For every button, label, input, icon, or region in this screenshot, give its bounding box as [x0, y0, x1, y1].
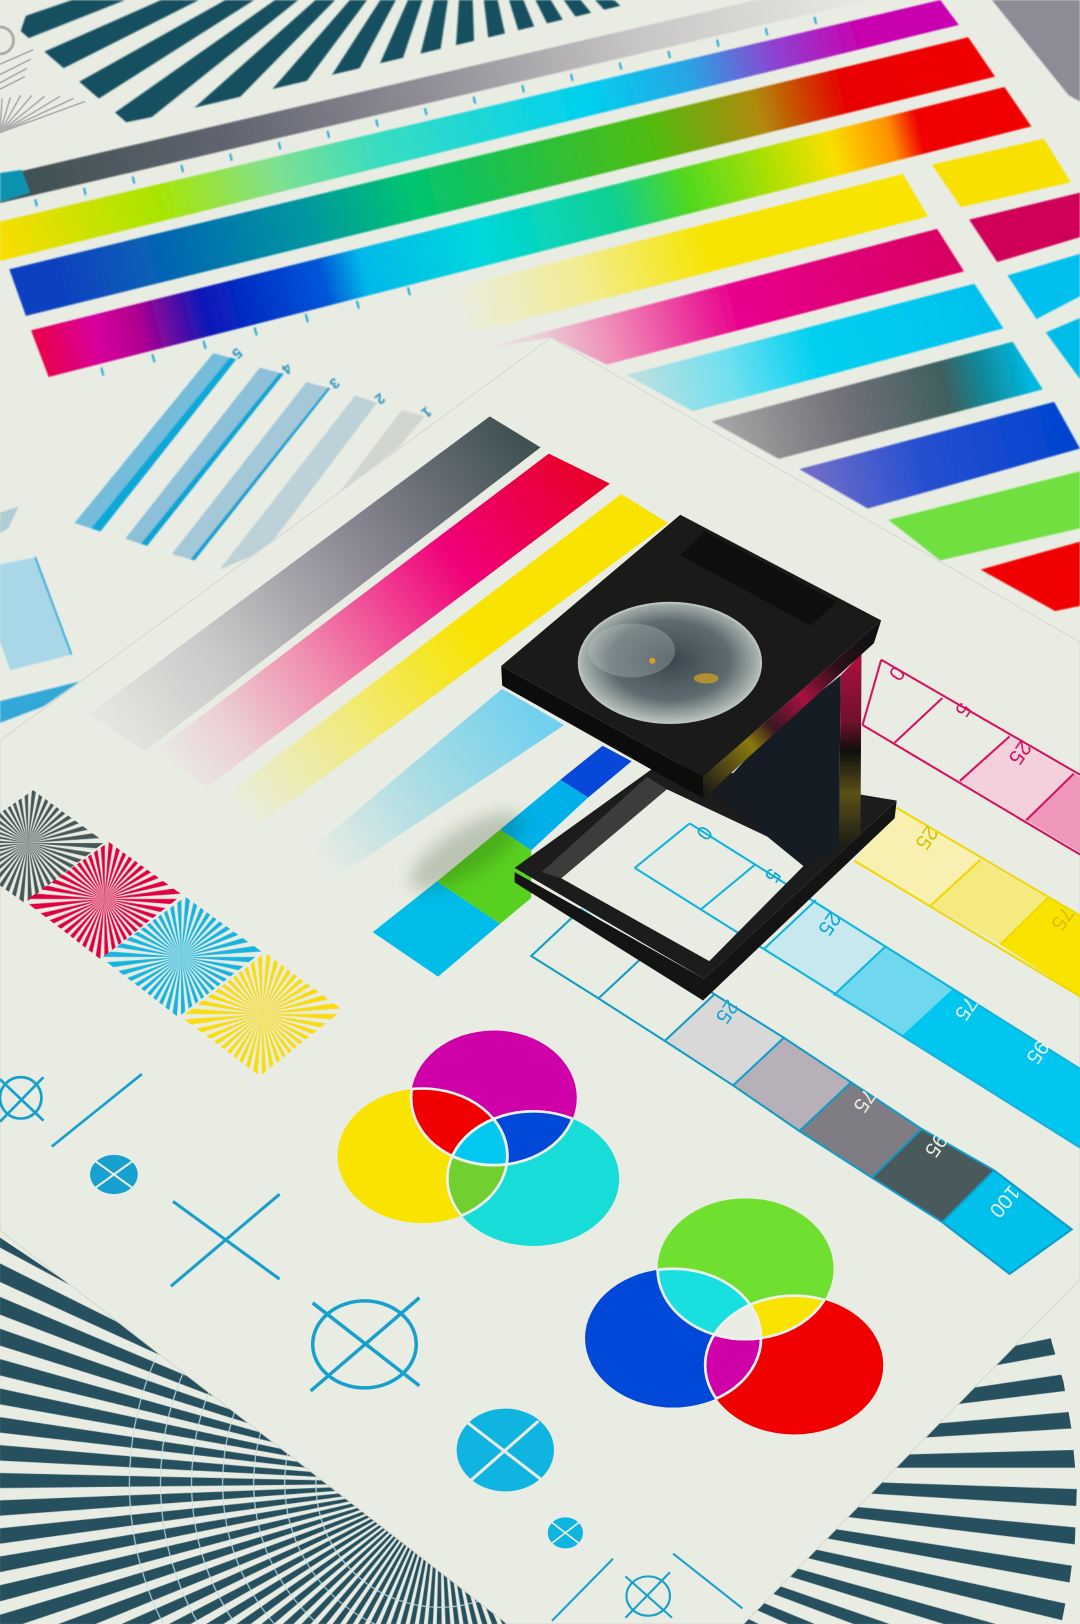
loupe top plate	[501, 515, 881, 799]
mark: small filled dot	[548, 1517, 583, 1548]
scale strip: black: 100	[985, 1181, 1024, 1222]
solid colour patches	[373, 746, 632, 977]
line gauges 5 to 1: 5	[228, 344, 245, 361]
loupe slot	[680, 531, 837, 626]
panel: main test sheet	[0, 338, 1080, 1624]
grey step wedge	[0, 0, 870, 203]
loupe soft shadow	[399, 798, 532, 905]
starburst: top	[21, 0, 632, 122]
scale strip: magenta: 5	[950, 698, 976, 721]
small starbursts row	[0, 790, 343, 1076]
scale strip: cyan: 25	[813, 908, 845, 940]
line gauges 5 to 1: 4	[278, 359, 295, 377]
scale strip: cyan: 0	[691, 822, 717, 844]
scale strip: black: 75	[848, 1085, 880, 1117]
small grey fans and ring, top left	[0, 27, 85, 133]
sheet corner: grey top right	[992, 0, 1080, 102]
starburst: bottom right	[725, 1315, 1077, 1624]
loupe pillar	[714, 654, 862, 868]
left edge cyan line gauges	[0, 506, 80, 723]
loupe base frame	[515, 761, 897, 1000]
mark: filled dot	[90, 1155, 138, 1194]
venn: subtractive CMY	[338, 1031, 619, 1246]
scale strip: yellow	[854, 808, 1080, 996]
mark: cross	[171, 1194, 280, 1286]
mark: large target	[311, 1298, 419, 1391]
mark: line	[52, 1074, 142, 1147]
starburst: bottom left	[0, 1238, 507, 1624]
scale strip: black	[531, 909, 1072, 1274]
scale strip: cyan: 95	[1021, 1036, 1053, 1068]
scale strip: magenta: 25	[1004, 737, 1036, 769]
line gauges 5 to 1	[75, 344, 434, 570]
scale strip: yellow: 75	[1046, 902, 1078, 934]
scale strip: yellow: 25	[910, 822, 943, 854]
mark: large filled dot	[457, 1409, 554, 1491]
mark: target left edge	[0, 1077, 43, 1122]
process colour fade bars	[88, 416, 668, 880]
scale strip: cyan: 75	[950, 992, 982, 1025]
icon: linen tester loupe	[501, 515, 897, 1000]
scale strip: black: 25	[711, 996, 743, 1028]
loupe lens	[579, 603, 761, 723]
scale strip: cyan	[635, 822, 1080, 1148]
scale strip: cyan: 5	[760, 864, 785, 887]
mark: bottom target and lines	[552, 1554, 742, 1621]
line gauges 5 to 1: 2	[371, 389, 388, 407]
venn: additive RGB	[585, 1198, 883, 1434]
scale strip: black: 95	[920, 1129, 952, 1161]
colour bars: top gradient strips	[0, 0, 1031, 377]
scale strip: magenta: 0	[884, 662, 909, 685]
scale strip: magenta	[863, 660, 1080, 854]
colour bars: second sheet	[445, 139, 1080, 611]
registration marks	[0, 1074, 742, 1621]
line gauges 5 to 1: 3	[326, 374, 342, 391]
line gauges 5 to 1: 1	[418, 403, 434, 420]
